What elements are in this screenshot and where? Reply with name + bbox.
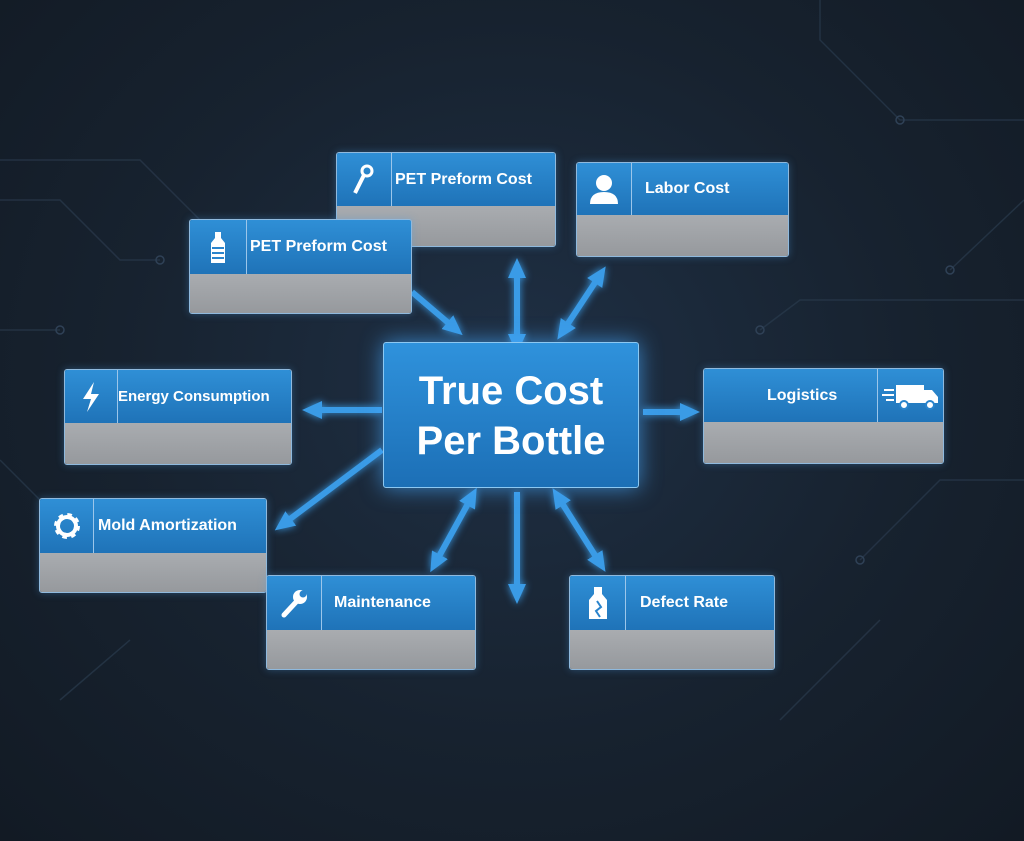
card: Mold Amortization: Mold Amortization	[98, 517, 237, 534]
card: Defect Rate: Defect Rate	[640, 594, 728, 611]
card: Maintenance	[266, 575, 476, 670]
card: PET Preform Cost top: PET Preform Cost	[395, 170, 532, 188]
center: True Cost Per Bottle: Per Bottle	[417, 419, 605, 463]
card: Energy Consumption	[64, 369, 292, 465]
card: Labor Cost: Labor Cost	[645, 180, 729, 197]
card: PET Preform Cost top	[336, 152, 556, 247]
card: Defect Rate	[569, 575, 775, 670]
center: True Cost Per Bottle	[383, 342, 639, 488]
card: Logistics: Logistics	[767, 386, 837, 404]
card: Mold Amortization	[39, 498, 267, 593]
card: Maintenance: Maintenance	[334, 594, 431, 611]
card: Logistics	[703, 368, 944, 464]
card: PET Preform Cost second: PET Preform Cost	[250, 238, 387, 255]
card: PET Preform Cost second	[189, 219, 412, 314]
card: Energy Consumption: Energy Consumption	[118, 388, 270, 405]
center: True Cost Per Bottle: True Cost	[419, 369, 603, 413]
card: Labor Cost	[576, 162, 789, 257]
